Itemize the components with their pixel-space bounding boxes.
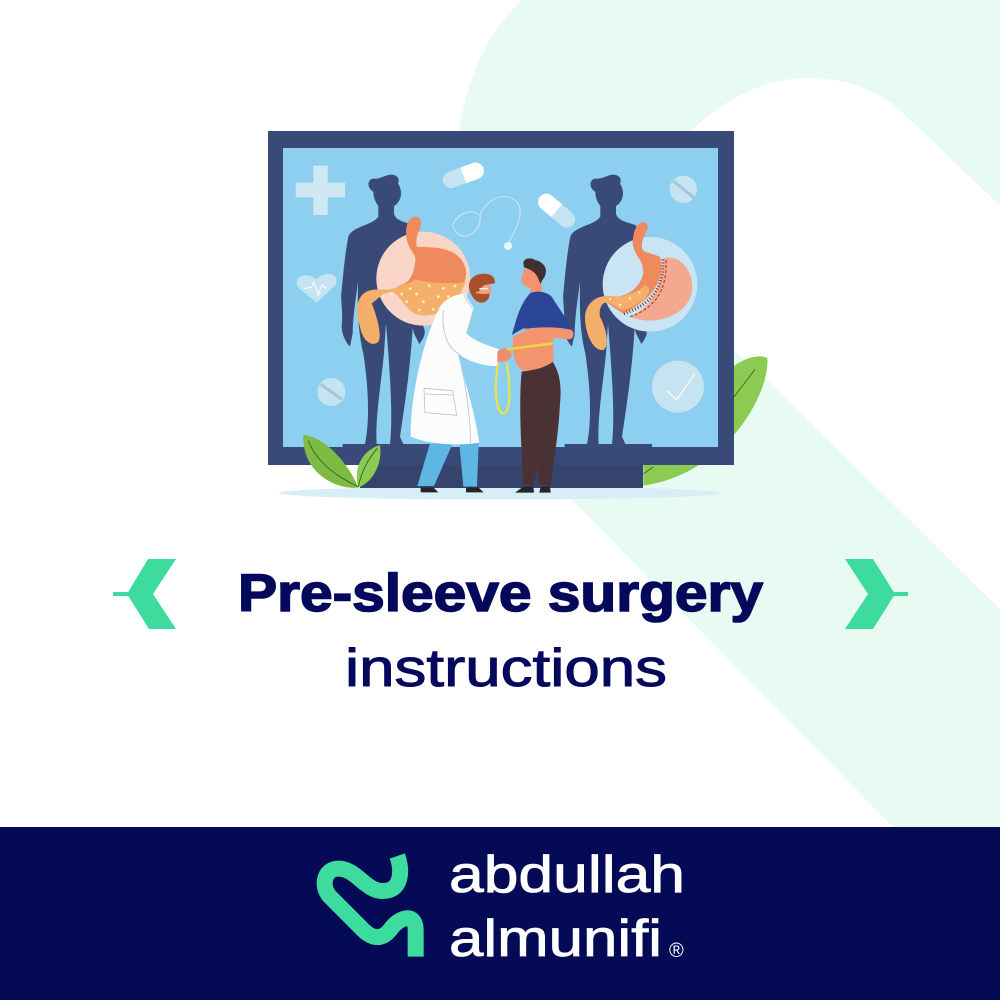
arrow: right chevron <box>845 559 908 629</box>
figure: doctor <box>411 274 512 492</box>
illustration: full stomach before surgery <box>357 217 470 344</box>
arrow: left chevron <box>113 559 176 629</box>
patient arm <box>523 327 573 339</box>
illustration: monitor screen <box>283 148 718 447</box>
illustration: left leaves <box>303 435 380 488</box>
icon: right tablet <box>670 176 697 203</box>
silhouette: left body <box>341 175 430 448</box>
illustration: right leaf <box>643 356 767 486</box>
doctor trousers <box>417 443 479 487</box>
logo wordmark: almunifi: almunifi <box>449 910 662 968</box>
icon: heart with pulse <box>297 274 337 303</box>
icon: cross <box>296 166 345 215</box>
patient hair <box>523 258 546 284</box>
patient belly <box>513 332 553 370</box>
illustration: medical icons <box>296 160 704 413</box>
icon: capsule diagonal <box>535 190 579 231</box>
illustration: monitor frame <box>268 131 734 465</box>
logo mark <box>325 856 416 957</box>
illustration: ground shadow <box>279 486 721 500</box>
illustration: sleeved stomach after surgery <box>585 222 697 350</box>
registered mark: ® <box>669 940 684 962</box>
patient neck and face <box>521 268 542 294</box>
logo wordmark: abdullah: abdullah <box>449 846 685 904</box>
icon: capsule top <box>440 160 486 190</box>
icon: check badge <box>652 361 704 413</box>
icon: stethoscope <box>453 197 520 250</box>
background mint ribbon <box>460 0 1000 827</box>
patient shoes <box>515 487 551 493</box>
doctor shoes <box>421 487 484 492</box>
icon: left tablet <box>317 378 345 406</box>
patient shirt <box>512 292 575 337</box>
measuring tape band <box>507 343 553 349</box>
title: first line: Pre-sleeve surgery <box>238 564 764 623</box>
doctor hand <box>497 348 512 362</box>
doctor hair and beard <box>469 274 495 303</box>
measuring tape loop <box>496 363 509 413</box>
doctor lab coat <box>411 294 499 444</box>
footer band <box>0 827 1000 1000</box>
patient trousers <box>520 362 561 485</box>
illustration: monitor stand <box>360 460 643 488</box>
doctor head <box>471 277 491 303</box>
doctor coat details <box>424 295 473 443</box>
figure: patient <box>507 258 575 493</box>
silhouette: right body <box>563 175 652 448</box>
title: second line: instructions <box>345 639 667 698</box>
doctor glasses <box>479 286 488 291</box>
